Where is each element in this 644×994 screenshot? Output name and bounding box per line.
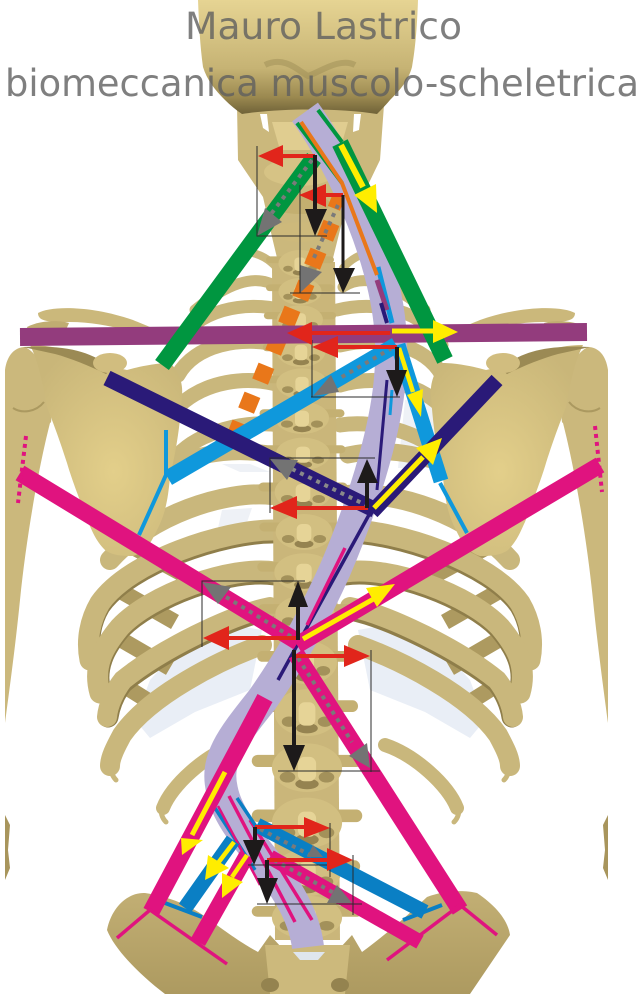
yellow arrow: pink lumbar	[222, 855, 247, 898]
spine curve: lavender band	[220, 112, 391, 947]
cartilage left	[135, 620, 262, 738]
cartilage right	[358, 620, 485, 738]
shoulder right	[431, 308, 608, 723]
red arrows	[203, 145, 397, 871]
shoulder left	[5, 308, 182, 723]
pelvis	[107, 891, 510, 994]
yellow arrow: navy	[374, 438, 442, 508]
pink muscle left upper	[20, 473, 298, 642]
black arrow 7	[243, 827, 265, 865]
yellow arrow: blue lumbar	[205, 842, 234, 880]
blue muscle lumbar right	[257, 825, 442, 920]
yellow arrow: trapezius	[392, 320, 458, 343]
pink muscle lumbar right	[270, 857, 420, 942]
yellow arrow: pink right	[303, 584, 395, 639]
thin lines over lumbar band	[215, 796, 312, 922]
force construction lines	[202, 146, 400, 915]
black arrow 6	[283, 650, 305, 771]
navy muscle left	[107, 378, 375, 510]
pink insertion dots	[18, 426, 602, 503]
black arrow 1	[305, 155, 327, 236]
red arrow 6	[203, 626, 298, 650]
pink muscle right upper	[297, 465, 600, 645]
red arrow 9	[267, 848, 353, 871]
red arrow 5	[270, 496, 368, 519]
purple bar: trapezius	[20, 267, 587, 337]
black arrows	[243, 155, 407, 904]
title: subject: biomeccanica muscolo-scheletrica	[5, 62, 639, 105]
black arrow 3	[386, 347, 407, 397]
orange thin line	[301, 122, 377, 275]
forearm fragments	[5, 815, 608, 880]
title: author name: Mauro Lastrico	[185, 5, 462, 48]
red arrow 7	[293, 645, 370, 667]
blue muscle lumbar left	[165, 840, 233, 917]
black arrow 4	[357, 459, 378, 508]
pink muscle right lower	[296, 654, 497, 960]
ribs right	[337, 253, 532, 822]
ribs left	[88, 253, 283, 822]
black arrow 8	[257, 860, 278, 904]
navy muscle right	[372, 380, 497, 512]
light blue muscle right	[377, 345, 467, 533]
neck and mandible	[237, 105, 384, 262]
red arrow 1	[258, 145, 315, 167]
yellow arrows	[181, 145, 458, 898]
red arrow 4	[312, 336, 397, 358]
red arrow 2	[299, 184, 343, 207]
red arrow 3	[287, 322, 390, 345]
skull	[198, 0, 418, 114]
green muscle right	[297, 110, 445, 360]
yellow arrow: rhomboid	[399, 348, 423, 417]
thin pink line	[307, 548, 345, 625]
pink muscle lumbar left inner	[198, 855, 247, 942]
pink muscle left lower	[117, 698, 265, 964]
yellow arrow: pink left lower	[181, 772, 225, 855]
orange muscle dots and arrow	[300, 205, 338, 293]
red arrow 8	[255, 817, 330, 838]
yellow arrow: neck	[341, 145, 377, 213]
black arrow 2	[333, 195, 355, 293]
spine column	[272, 262, 340, 940]
orange dashed muscle	[226, 194, 345, 442]
green muscle left	[162, 158, 314, 365]
navy thin line	[278, 513, 370, 680]
light blue muscle left	[139, 345, 396, 535]
black arrow 5	[288, 581, 308, 640]
